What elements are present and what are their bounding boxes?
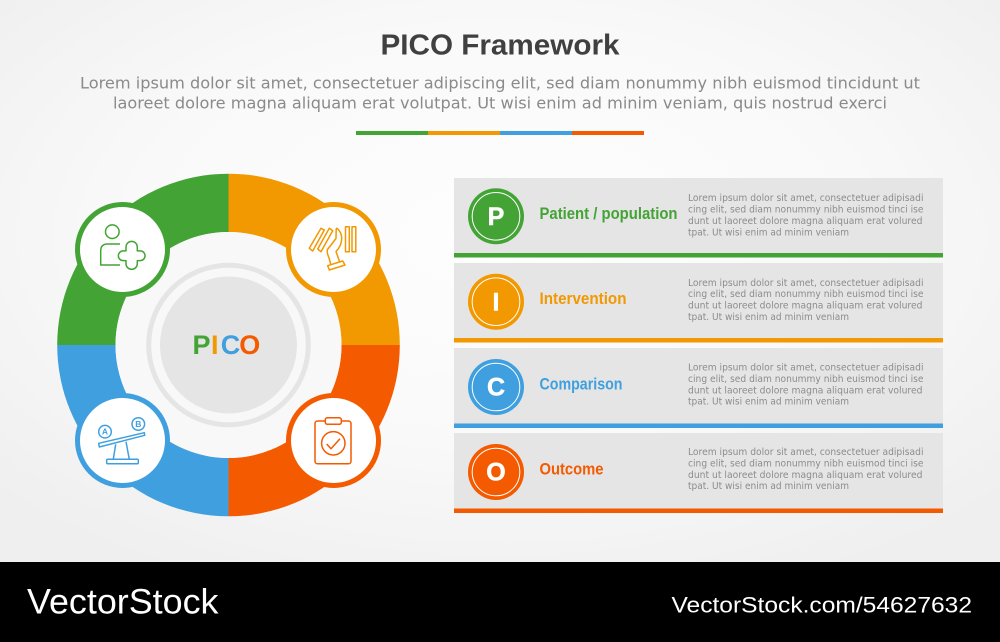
description: Lorem ipsum dolor sit amet, consectetuer adipisadi (688, 278, 924, 289)
icon badge: intervention (288, 204, 378, 294)
subtitle text block (80, 74, 920, 112)
icon badge: comparison (78, 396, 168, 486)
letter badge I: I (493, 288, 499, 316)
description: dunt ut laoreet dolore magna aliquam erat volured (688, 216, 922, 227)
description (688, 193, 924, 238)
centre hub (116, 232, 342, 458)
heading: Outcome (540, 461, 604, 479)
letter badge P: P (488, 203, 504, 231)
description: dunt ut laoreet dolore magna aliquam erat volured (688, 301, 922, 312)
ring segment: comparison (57, 345, 229, 516)
letter badge C: C (487, 374, 505, 402)
circular PICO diagram (57, 174, 400, 516)
letter badge O (468, 444, 524, 500)
centre label PICO: O (239, 330, 260, 360)
letter badge C (468, 359, 524, 415)
description: cing elit, sed diam nonummy nibh euismod tinci ise (688, 374, 924, 385)
four-colour divider (356, 131, 644, 135)
description: cing elit, sed diam nonummy nibh euismod tinci ise (688, 458, 924, 469)
footer brand: VectorStock (27, 582, 219, 621)
ring segment: outcome (228, 345, 400, 516)
description (688, 362, 924, 408)
description (688, 447, 924, 492)
heading: Intervention (540, 290, 626, 308)
description: cing elit, sed diam nonummy nibh euismod tinci ise (688, 204, 924, 216)
footer image id: VectorStock.com/54627632 (672, 593, 972, 618)
description: cing elit, sed diam nonummy nibh euismod tinci ise (688, 289, 924, 300)
description: Lorem ipsum dolor sit amet, consectetuer adipisadi (688, 193, 924, 204)
description: tpat. Ut wisi enim ad minim veniam (688, 312, 849, 323)
description: dunt ut laoreet dolore magna aliquam erat volured (688, 470, 922, 481)
footer bar (0, 562, 1000, 642)
icon badge: patient (78, 204, 168, 294)
letter badge O: O (486, 459, 506, 487)
description: Lorem ipsum dolor sit amet, consectetuer adipisadi (688, 447, 924, 458)
letter badge I (468, 274, 524, 330)
centre label PICO: I (211, 330, 219, 360)
description: tpat. Ut wisi enim ad minim veniam (688, 228, 849, 238)
description: tpat. Ut wisi enim ad minim veniam (688, 397, 849, 408)
description (688, 278, 924, 323)
description: dunt ut laoreet dolore magna aliquam erat volured (688, 385, 922, 396)
heading: Comparison (540, 376, 622, 394)
icon badge: comparison: B (135, 419, 141, 429)
row: Comparison (454, 348, 943, 428)
icon badge: comparison: A (102, 427, 108, 437)
subtitle text block: laoreet dolore magna aliquam erat volutpat. Ut wisi enim ad minim veniam, quis nostrud exerci (113, 94, 887, 112)
description: tpat. Ut wisi enim ad minim veniam (688, 481, 849, 492)
icon badge: outcome (288, 396, 378, 486)
row: Outcome (454, 433, 943, 513)
subtitle text block: Lorem ipsum dolor sit amet, consectetuer adipiscing elit, sed diam nonummy nibh euismod tincidunt ut (80, 74, 920, 92)
heading: Patient / population (540, 205, 678, 223)
centre label PICO: P (192, 330, 211, 360)
centre label PICO: C (221, 330, 240, 360)
ring segment: patient (57, 174, 229, 345)
row: Intervention (454, 263, 943, 342)
row: Patient / population (454, 178, 943, 258)
title: PICO Framework (380, 30, 620, 62)
letter badge P (468, 188, 524, 244)
ring segment: intervention (228, 174, 400, 345)
description: Lorem ipsum dolor sit amet, consectetuer adipisadi (688, 362, 924, 374)
